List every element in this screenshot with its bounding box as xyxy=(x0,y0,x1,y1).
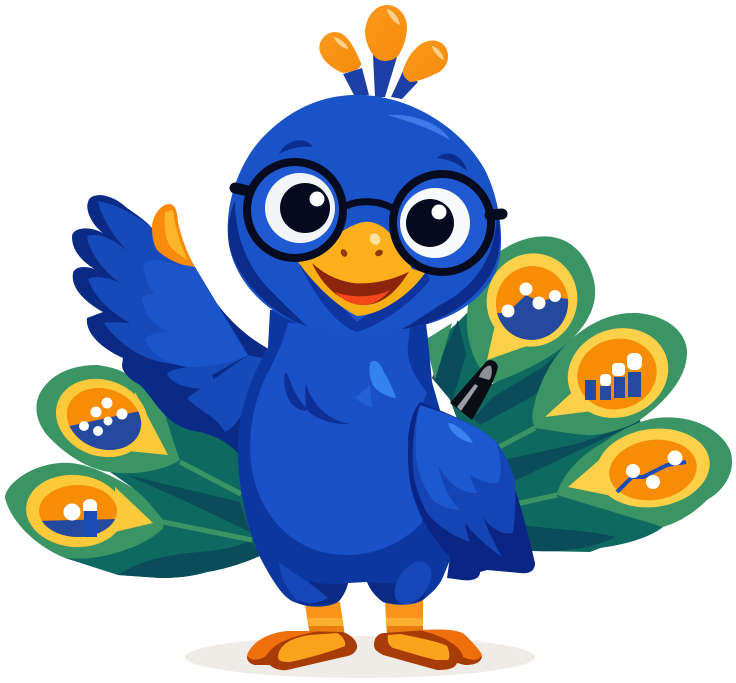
chest feather marks xyxy=(284,361,422,442)
wing mid feathers xyxy=(413,405,515,557)
left foot xyxy=(247,631,357,670)
wing mid feathers xyxy=(87,201,248,367)
right wing xyxy=(408,402,535,580)
crest xyxy=(319,5,448,99)
tail feather: top right xyxy=(467,236,595,383)
stem xyxy=(163,522,252,540)
stem xyxy=(516,495,557,504)
wing dark base xyxy=(408,402,535,580)
ground shadow xyxy=(185,636,535,678)
right foot xyxy=(374,630,482,670)
head xyxy=(228,95,502,340)
tail feather: middle right xyxy=(497,313,687,448)
right eye xyxy=(396,177,488,269)
belly xyxy=(250,323,427,555)
stem xyxy=(180,462,241,494)
thigh shading xyxy=(279,555,439,611)
tail feather: lower left xyxy=(5,463,252,559)
stem xyxy=(497,428,535,448)
legs xyxy=(305,600,423,636)
thumb feather xyxy=(152,204,195,267)
glasses xyxy=(235,162,502,272)
tail feather: lower right xyxy=(515,417,732,551)
eyebrows xyxy=(279,140,467,171)
wing light feathers xyxy=(416,405,501,510)
crest bulbs xyxy=(319,32,361,73)
crest stems xyxy=(343,55,418,99)
left wing xyxy=(72,195,267,455)
body xyxy=(238,310,452,607)
wing dark base xyxy=(72,195,267,455)
wing light feathers xyxy=(142,259,248,367)
tail base left xyxy=(65,398,262,578)
pen xyxy=(450,360,498,420)
tail base right xyxy=(425,300,660,552)
left eye xyxy=(250,165,340,255)
tail feather: upper left xyxy=(36,365,241,494)
beak and mouth xyxy=(298,222,425,316)
head highlight xyxy=(387,115,450,140)
head shading xyxy=(402,210,500,329)
